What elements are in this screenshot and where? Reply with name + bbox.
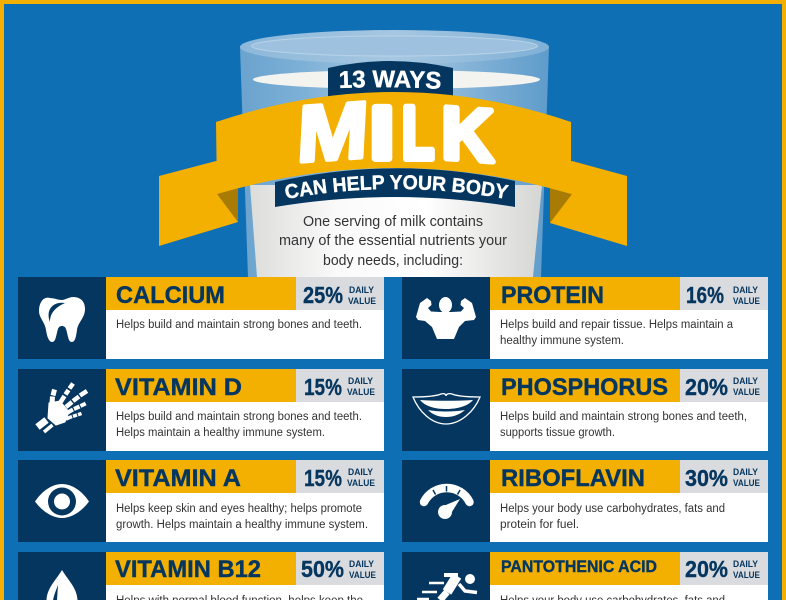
heading: calcium: CALCIUM bbox=[116, 282, 225, 309]
title: MILK: K bbox=[442, 91, 494, 178]
heading: vitamin d: VITAMIN D bbox=[115, 374, 242, 401]
heading: vitamin b12: VITAMIN B12 bbox=[115, 556, 261, 583]
intro text bbox=[279, 214, 507, 269]
icon: gauge bbox=[424, 486, 470, 519]
value: 25% daily value: VALUE bbox=[348, 296, 376, 306]
value: 30% daily value: VALUE bbox=[733, 478, 760, 488]
banner label: 13 ways bbox=[328, 61, 453, 96]
title: MILK: L bbox=[402, 92, 434, 174]
value: 16% daily value: 16% bbox=[686, 282, 724, 308]
value: 50% daily value: VALUE bbox=[349, 570, 376, 580]
panel: phosphorus bbox=[402, 369, 768, 451]
intro text: many of the essential nutrients your bbox=[279, 233, 507, 249]
heading: riboflavin: RIBOFLAVIN bbox=[501, 465, 645, 492]
value: 15% daily value bbox=[304, 374, 375, 400]
description: protein for fuel. bbox=[500, 519, 579, 531]
value: 15% daily value: 15% bbox=[304, 465, 342, 491]
value: 16% daily value: VALUE bbox=[733, 296, 760, 306]
icon: smile bbox=[413, 394, 480, 424]
heading: pantothenic acid: PANTOTHENIC ACID bbox=[501, 557, 657, 576]
description bbox=[500, 503, 725, 531]
icon: blood drop bbox=[46, 570, 78, 600]
value: 15% daily value: VALUE bbox=[347, 478, 375, 488]
value: 16% daily value bbox=[686, 282, 760, 308]
value: 15% daily value: VALUE bbox=[347, 387, 375, 397]
heading: vitamin a: VITAMIN A bbox=[115, 465, 241, 492]
value: 15% daily value: 15% bbox=[304, 374, 342, 400]
description bbox=[116, 411, 362, 439]
value: 30% daily value: 30% bbox=[685, 465, 728, 491]
value: 20% daily value: VALUE bbox=[733, 570, 760, 580]
banner label: 13 ways: 13 WAYS bbox=[340, 70, 440, 89]
description: Helps build and maintain strong bones and teeth. bbox=[116, 411, 362, 423]
description: growth. Helps maintain a healthy immune system. bbox=[116, 519, 368, 531]
heading: protein: PROTEIN bbox=[501, 282, 604, 309]
gold ribbon bbox=[159, 92, 627, 246]
description: Helps maintain a healthy immune system. bbox=[116, 427, 325, 439]
value: 20% daily value: DAILY bbox=[733, 559, 758, 569]
panel: vitamin d bbox=[18, 369, 384, 451]
value: 15% daily value bbox=[304, 465, 375, 491]
icon: tooth bbox=[39, 297, 85, 342]
panel: protein bbox=[402, 277, 768, 359]
value: 25% daily value: 25% bbox=[303, 282, 343, 308]
title: MILK: M bbox=[295, 85, 371, 180]
value: 25% daily value bbox=[303, 282, 376, 308]
intro text: One serving of milk contains bbox=[303, 214, 483, 230]
description: Helps your body use carbohydrates, fats and bbox=[500, 503, 725, 515]
description: Helps build and maintain strong bones and teeth, bbox=[500, 411, 747, 423]
title: MILK: I bbox=[370, 92, 394, 174]
value: 50% daily value: DAILY bbox=[349, 559, 374, 569]
panel: calcium bbox=[18, 277, 384, 359]
illustration: milk glass bbox=[240, 30, 549, 277]
value: 20% daily value: DAILY bbox=[733, 376, 758, 386]
description bbox=[116, 503, 368, 531]
description: supports tissue growth. bbox=[500, 427, 615, 439]
title: MILK bbox=[295, 85, 494, 180]
value: 50% daily value bbox=[301, 556, 376, 582]
icon: muscle torso bbox=[416, 297, 476, 339]
icon: eye bbox=[35, 484, 89, 518]
value: 20% daily value: VALUE bbox=[733, 387, 760, 397]
banner label: can help your body: CAN HELP YOUR BODY bbox=[285, 175, 510, 198]
description: Helps build and maintain strong bones and teeth. bbox=[116, 319, 362, 331]
panel: vitamin a bbox=[18, 460, 384, 542]
heading: phosphorus: PHOSPHORUS bbox=[501, 374, 668, 401]
description: Helps keep skin and eyes healthy; helps promote bbox=[116, 503, 362, 515]
value: 16% daily value: DAILY bbox=[733, 285, 758, 295]
description bbox=[500, 411, 747, 439]
description: Helps build and repair tissue. Helps maintain a bbox=[500, 319, 734, 331]
value: 20% daily value bbox=[685, 374, 760, 400]
panel: vitamin b12 bbox=[18, 552, 384, 600]
description: healthy immune system. bbox=[500, 335, 624, 347]
value: 20% daily value: 20% bbox=[685, 374, 728, 400]
panel: riboflavin bbox=[402, 460, 768, 542]
value: 50% daily value: 50% bbox=[301, 556, 344, 582]
icon: runner bbox=[417, 574, 477, 600]
value: 25% daily value: DAILY bbox=[349, 285, 374, 295]
value: 15% daily value: DAILY bbox=[348, 467, 373, 477]
intro text: body needs, including: bbox=[323, 253, 463, 269]
description bbox=[500, 319, 734, 347]
value: 30% daily value: DAILY bbox=[733, 467, 758, 477]
icon: hand bones bbox=[38, 384, 87, 432]
value: 30% daily value bbox=[685, 465, 760, 491]
value: 20% daily value bbox=[685, 556, 760, 582]
panel: pantothenic acid bbox=[402, 552, 768, 600]
value: 20% daily value: 20% bbox=[685, 556, 728, 582]
value: 15% daily value: DAILY bbox=[348, 376, 373, 386]
